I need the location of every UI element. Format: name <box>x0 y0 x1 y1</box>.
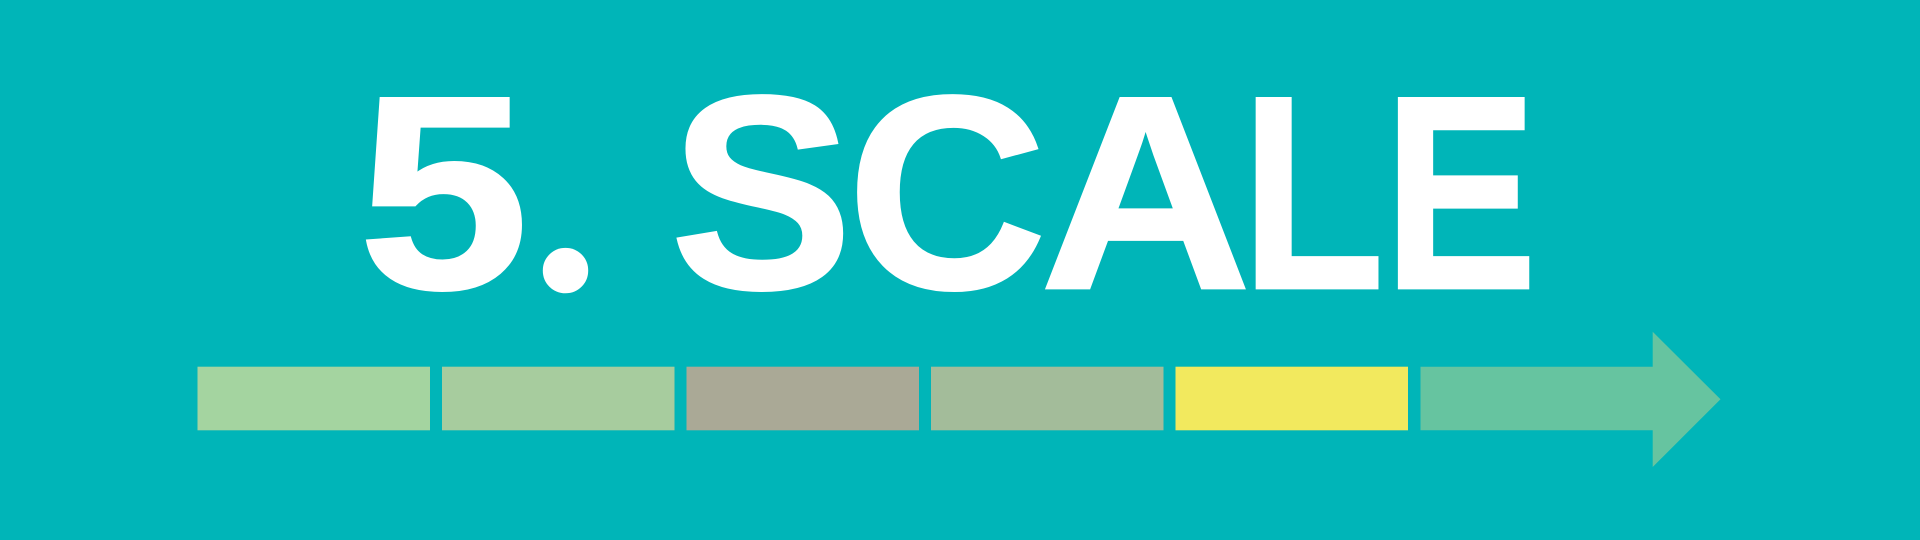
title: 5. SCALE: . <box>530 39 600 350</box>
progress bar with arrow <box>198 332 1720 467</box>
segment 1 <box>198 367 430 430</box>
title: 5. SCALE: E <box>1384 38 1537 347</box>
title: 5. SCALE: S <box>670 39 853 347</box>
segment 2 <box>442 367 674 430</box>
title: 5. SCALE: C <box>847 38 1047 347</box>
title: 5. SCALE: L <box>1241 39 1385 347</box>
segment 4 <box>931 367 1164 430</box>
title: 5. SCALE <box>358 38 1537 350</box>
segment 5: highlighted <box>1176 367 1408 430</box>
arrow segment <box>1420 332 1720 467</box>
segment 3 <box>686 367 919 430</box>
title: 5. SCALE: 5 <box>358 38 529 347</box>
title: 5. SCALE: A <box>1040 39 1252 347</box>
